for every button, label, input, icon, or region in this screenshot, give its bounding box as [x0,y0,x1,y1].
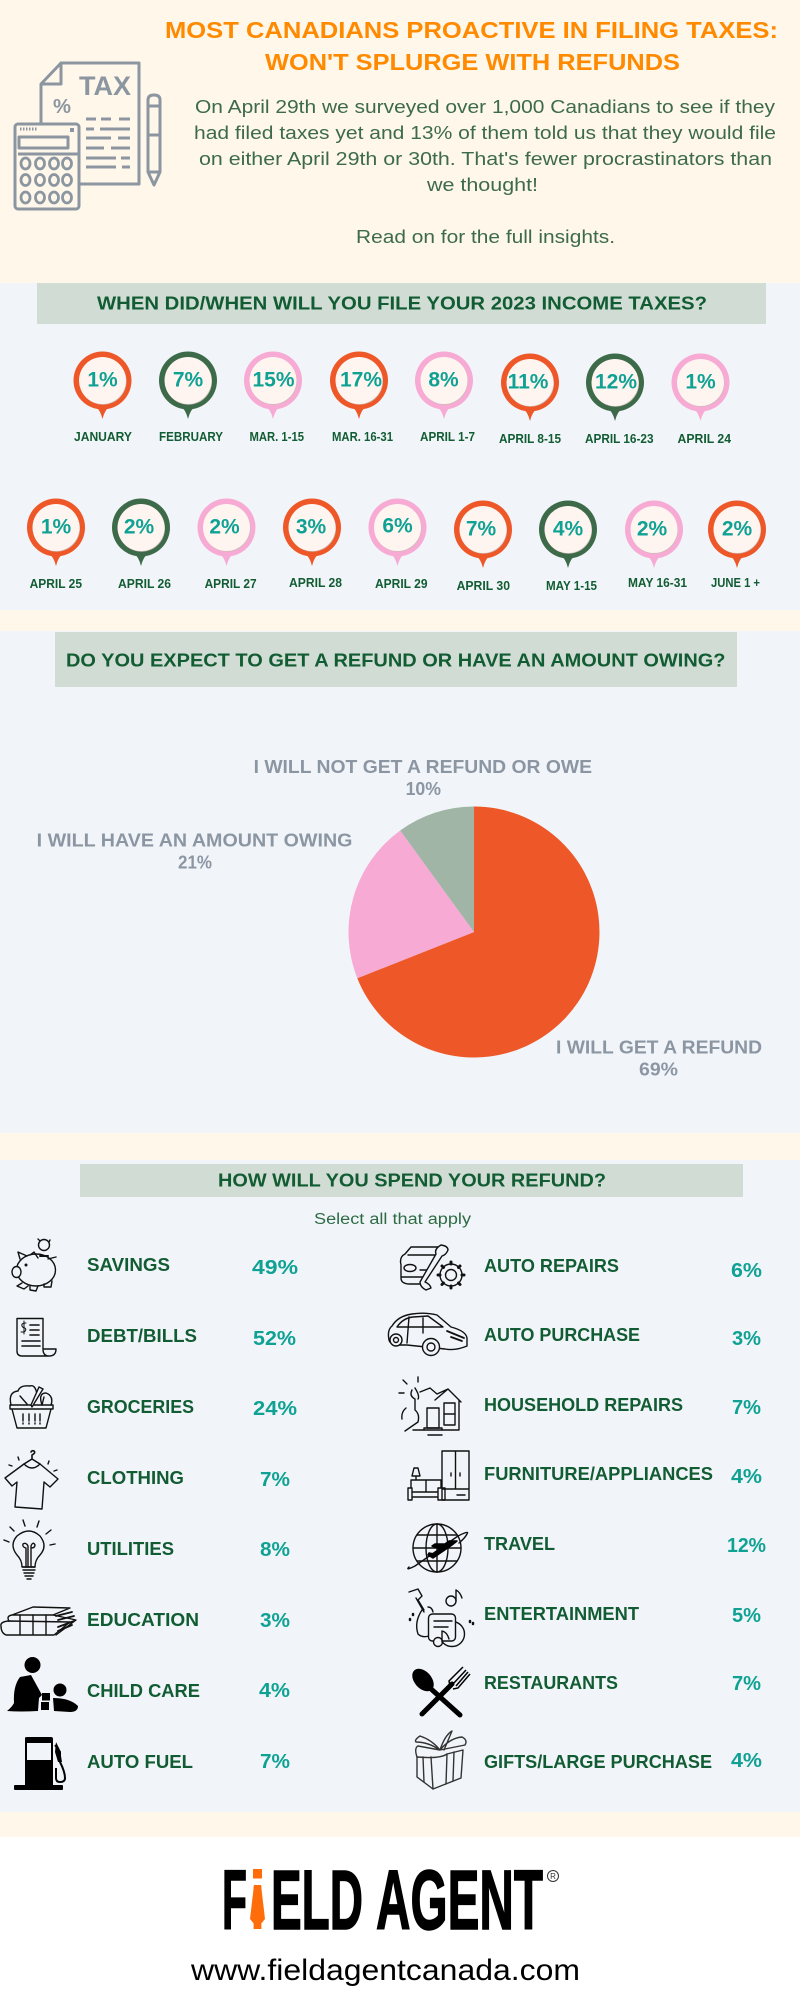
row: auto fuel [14,1737,290,1790]
logo: Field Agent [222,1853,558,1947]
pin: April 25 1% [27,498,85,591]
pin: April 28 3%: APRIL 28 [289,576,342,590]
pin: April 26 2%: 2% [124,516,154,538]
pie label: amount owing 21%: 21% [178,852,212,872]
row: furniture and appliances: FURNITURE/APPLIANCES [484,1464,713,1484]
row: child care: CHILD CARE [87,1681,200,1701]
intro text block: had filed taxes yet and 13% of them told us that they would file [194,122,776,143]
icon: tax form, calculator and pencil [15,63,160,209]
pin: January 1% [74,352,133,444]
pin: April 27 2%: 2% [209,516,240,538]
panel: refund or owing [0,631,800,1133]
row: groceries [10,1386,297,1428]
row: education [1,1607,290,1635]
row: debt and bills: DEBT/BILLS [87,1326,197,1346]
icon: sofa, lamp and wardrobe [408,1451,469,1500]
icon: guitar and music notes [409,1589,473,1646]
pin: April 16-23 12%: APRIL 16-23 [585,432,654,446]
cream divider band [0,1812,800,1837]
subtitle: Select all that apply [314,1211,471,1228]
row: auto repairs: 6% [731,1259,762,1282]
row: restaurants: RESTAURANTS [484,1673,618,1693]
pin: April 29 6%: 6% [382,514,413,538]
logo: Field Agent: R [550,1872,556,1881]
icon: grocery basket [10,1386,53,1428]
row: gifts and large purchase [416,1731,762,1789]
icon: adult and baby with blocks [7,1657,78,1712]
row: gifts and large purchase: GIFTS/LARGE PURCHASE [484,1752,712,1772]
website url: www.fieldagentcanada.com [190,1954,580,1987]
row: debt and bills [17,1318,296,1356]
pin: April 1-7 8% [415,352,475,444]
intro text block: we thought! [426,174,538,195]
pin: April 26 2% [112,498,171,591]
panel: intro header [0,0,800,283]
heading bar: spending: HOW WILL YOU SPEND YOUR REFUND? [218,1170,606,1190]
intro text block: On April 29th we surveyed over 1,000 Canadians to see if they [195,96,776,117]
row: savings [12,1239,298,1291]
pin: April 8-15 11%: 11% [508,370,549,394]
pie label: no refund or owing 10%: I WILL NOT GET A REFUND OR OWE [254,756,592,777]
icon: fuel pump [14,1737,65,1790]
pin: March 16-31 17%: MAR. 16-31 [332,430,393,444]
title: WON'T SPLURGE WITH REFUNDS [265,49,680,75]
logo: Field Agent: I [250,1874,265,1943]
row: household repairs: 7% [732,1396,761,1419]
pin: June 1+ 2% [708,500,766,590]
row: furniture and appliances: 4% [731,1465,762,1488]
row: groceries: GROCERIES [87,1397,194,1417]
pin: April 8-15 11% [499,354,561,446]
pin: May 1-15 4%: 4% [553,518,583,540]
pie label: no refund or owing 10%: 10% [406,778,441,799]
pin: March 16-31 17%: 17% [340,368,382,392]
pie label: refund 69%: I WILL GET A REFUND [556,1036,762,1058]
pin: March 16-31 17% [330,352,393,444]
row: clothing: CLOTHING [87,1468,184,1488]
row: education: EDUCATION [87,1610,199,1630]
pie label: refund 69% [556,1036,762,1080]
pin: March 1-15 15% [244,352,304,444]
icon: house and wrench [399,1377,461,1435]
panel: how will you spend your refund [0,1160,800,1812]
pin: April 1-7 8%: APRIL 1-7 [420,430,475,444]
pin: April 26 2%: APRIL 26 [118,577,171,591]
row: entertainment: 5% [732,1604,761,1627]
row: child care [7,1657,290,1712]
pin: June 1+ 2%: JUNE 1 + [711,576,760,590]
row: restaurants [408,1665,761,1715]
icon: t-shirt on hanger [5,1451,58,1509]
row: travel: TRAVEL [484,1534,555,1554]
pin: April 24 1% [672,354,731,446]
pie label: amount owing 21% [37,830,352,872]
pin: April 25 1%: 1% [41,516,71,538]
icon: globe and airplane [408,1524,468,1572]
pin: February 7%: FEBRUARY [159,430,224,444]
logo: Field Agent: AGENT [376,1853,543,1947]
pin: February 7% [159,352,224,444]
row: education: 3% [260,1609,290,1632]
icon: stacked books [1,1607,76,1635]
pin: April 25 1%: APRIL 25 [30,577,82,591]
pin: April 1-7 8%: 8% [428,368,459,392]
pin: April 29 6% [368,498,428,591]
intro text block: on either April 29th or 30th. That's fewer procrastinators than [199,148,772,169]
row: auto repairs [400,1245,762,1290]
heading bar: spending [80,1164,743,1197]
icon: bill [17,1318,56,1356]
panel: when did you file [0,283,800,610]
pin: April 24 1%: APRIL 24 [678,432,731,446]
row: auto purchase [388,1313,761,1356]
row: entertainment [409,1589,761,1646]
pin: April 30 7%: APRIL 30 [457,579,510,593]
row: travel [408,1524,766,1572]
pin: May 16-31 2%: MAY 16-31 [628,576,687,590]
row: restaurants: 7% [732,1672,761,1695]
row: auto purchase: AUTO PURCHASE [484,1325,640,1345]
heading bar: refund: DO YOU EXPECT TO GET A REFUND OR HAVE AN AMOUNT OWING? [66,650,726,670]
intro text block: Read on for the full insights. [356,226,615,247]
pin: April 27 2%: APRIL 27 [205,577,257,591]
icon: crossed spoon and fork [408,1665,470,1715]
row: household repairs: HOUSEHOLD REPAIRS [484,1395,683,1415]
title: MOST CANADIANS PROACTIVE IN FILING TAXES: [165,17,778,43]
icon: car with wrench and gear [400,1245,464,1290]
row: clothing: 7% [260,1468,290,1491]
logo: Field Agent: ELD [271,1853,363,1947]
row: utilities [4,1520,290,1579]
row: clothing [5,1451,290,1509]
pin: April 30 7%: 7% [466,518,496,540]
pie chart [348,806,599,1058]
row: utilities: 8% [260,1538,290,1561]
icon: tax form, calculator and pencil: % [53,96,71,118]
row: entertainment: ENTERTAINMENT [484,1604,639,1624]
pin: April 29 6%: APRIL 29 [375,577,428,591]
pin: April 27 2% [198,498,257,591]
row: travel: 12% [727,1534,766,1557]
row: gifts and large purchase: 4% [731,1749,762,1772]
pie label: amount owing 21%: I WILL HAVE AN AMOUNT OWING [37,830,352,850]
row: furniture and appliances [408,1451,762,1500]
icon: light bulb [4,1520,55,1579]
heading bar: filing dates [37,283,766,324]
footer [0,1837,800,2000]
pin: April 16-23 12%: 12% [595,370,637,394]
row: auto fuel: 7% [260,1750,290,1773]
icon: piggy bank [12,1239,56,1291]
row: savings: SAVINGS [87,1255,170,1275]
cream divider band [0,610,800,631]
pin: January 1%: JANUARY [74,430,133,444]
row: auto repairs: AUTO REPAIRS [484,1256,619,1276]
pin: May 1-15 4% [539,500,597,593]
row: savings: 49% [252,1256,298,1279]
heading bar: filing dates: WHEN DID/WHEN WILL YOU FILE YOUR 2023 INCOME TAXES? [97,292,707,314]
icon: tax form, calculator and pencil: TAX [79,71,131,101]
pin: May 16-31 2%: 2% [637,518,667,540]
pie label: refund 69%: 69% [639,1058,678,1080]
pin: April 28 3% [283,498,342,590]
row: groceries: 24% [253,1397,297,1420]
row: child care: 4% [259,1679,290,1702]
pie label: no refund or owing 10% [254,756,592,799]
icon: gift box with bow [416,1731,466,1789]
intro text block [194,96,776,247]
pin: April 30 7% [454,500,512,593]
row: auto fuel: AUTO FUEL [87,1752,193,1772]
title [165,17,778,75]
row: debt and bills: 52% [253,1327,296,1350]
pin: February 7%: 7% [173,368,203,392]
pin: May 1-15 4%: MAY 1-15 [546,579,597,593]
logo: Field Agent: F [222,1853,247,1947]
pin: June 1+ 2%: 2% [722,518,752,540]
cream divider band [0,1133,800,1160]
row: household repairs [399,1377,761,1435]
heading bar: refund [55,632,737,687]
row: utilities: UTILITIES [87,1539,174,1559]
pin: April 28 3%: 3% [296,516,326,538]
pin: April 8-15 11%: APRIL 8-15 [499,432,561,446]
icon: SUV [388,1313,467,1356]
pin: March 1-15 15%: 15% [252,368,295,392]
pin: March 1-15 15%: MAR. 1-15 [250,430,304,444]
pin: May 16-31 2% [625,500,687,590]
row: auto purchase: 3% [732,1327,761,1350]
pin: April 16-23 12% [585,354,654,446]
pin: January 1%: 1% [87,368,118,392]
pin: April 24 1%: 1% [685,370,716,394]
